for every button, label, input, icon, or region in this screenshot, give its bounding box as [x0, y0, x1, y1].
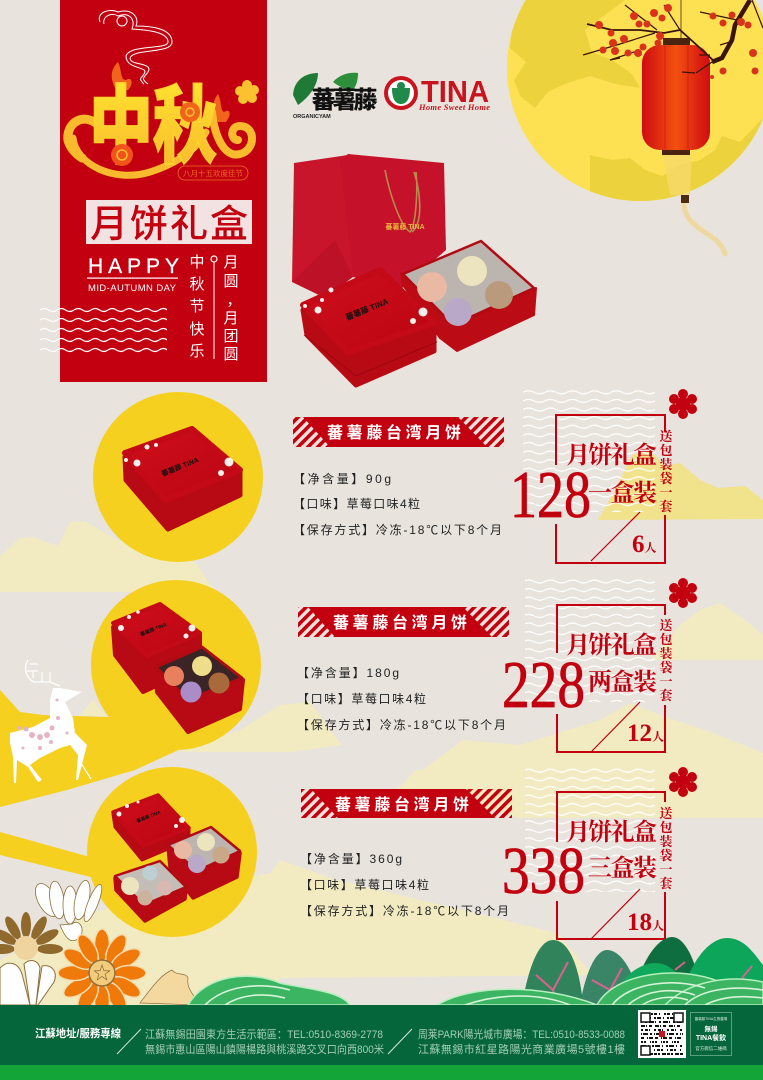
- price card 2: 12人: [627, 720, 664, 747]
- qr code: [638, 1010, 686, 1058]
- subtitle 月饼礼盒: 月饼礼盒: [90, 204, 248, 246]
- price card 2: [502, 578, 673, 752]
- ribbon 1: [293, 417, 504, 447]
- details 2: 【保存方式】冷冻-18℃以下8个月: [297, 717, 506, 732]
- orange daisy: ★: [94, 964, 110, 983]
- vertical greeting: 中秋节快乐: [189, 254, 205, 360]
- closed box: [303, 270, 437, 385]
- qr label: 蕃薯藤TINA生態農場: [695, 1016, 728, 1021]
- address block 2: [418, 1027, 625, 1056]
- price card 1: 月饼礼盒: [566, 442, 657, 469]
- happy text: [87, 255, 179, 294]
- details 3: 【口味】草莓口味4粒: [300, 877, 429, 892]
- slashes: [117, 1029, 412, 1054]
- striped hills: [188, 973, 763, 1005]
- white fan flower: [0, 961, 55, 1005]
- product row 1: [93, 388, 697, 563]
- tina logo: TINA: [421, 74, 489, 109]
- brand logos: [293, 73, 490, 120]
- price card 3: [502, 768, 673, 939]
- circle photo 3: 蕃薯藤 TINA: [135, 808, 162, 825]
- circle photo 1: [93, 392, 263, 562]
- orange daisy: [58, 929, 146, 1017]
- organicyam logo: 蕃薯藤: [312, 87, 377, 114]
- details 3: 【保存方式】冷冻-18℃以下8个月: [300, 903, 509, 918]
- price card 2: 月饼礼盒: [566, 632, 657, 659]
- price card 3: 月饼礼盒: [566, 819, 657, 846]
- curl ornaments: [111, 102, 200, 166]
- garden flowers: [0, 879, 199, 1017]
- date pill: [178, 166, 248, 180]
- smoke swirl: [99, 10, 172, 84]
- closed box: 蕃薯藤 TINA: [344, 296, 390, 322]
- title 中秋: 中秋: [89, 58, 217, 181]
- details 1: 【口味】草莓口味4粒: [293, 496, 420, 511]
- address block 1: [145, 1027, 384, 1056]
- price card 1: 128: [510, 458, 591, 532]
- circle photo 3: [87, 767, 257, 937]
- vertical couplet: 月圆，月团圆: [223, 254, 242, 363]
- address block 1: 江蘇無錫田園東方生活示範區：TEL:0510-8369-2778: [145, 1027, 383, 1041]
- qr label: TINA餐飲: [696, 1033, 726, 1042]
- organicyam logo: ORGANICYAM: [293, 114, 331, 120]
- open box: [401, 241, 536, 351]
- gift bag: 蕃薯藤 TINA: [385, 222, 425, 231]
- tan leaf: [140, 970, 199, 1005]
- ribbon 2: 蕃薯藤台湾月饼: [333, 613, 467, 632]
- product row 3: [87, 767, 697, 939]
- ribbon 1: 蕃薯藤台湾月饼: [327, 423, 461, 442]
- green hills: [188, 937, 763, 1005]
- price card 1: 送包装袋一套: [659, 429, 673, 514]
- details 2: [297, 665, 506, 732]
- moon: [507, 0, 763, 210]
- brown daisy: [0, 912, 63, 960]
- circle photo 1: 蕃薯藤 TINA: [160, 455, 200, 478]
- swash: [68, 112, 252, 175]
- qr label: 官方微信二維碼: [695, 1045, 727, 1052]
- flames: [112, 62, 230, 122]
- price card 3: 18人: [627, 909, 664, 936]
- price card 1: [510, 388, 673, 563]
- hills and yellow bands: [0, 450, 763, 1005]
- tina logo: [384, 74, 490, 112]
- details 1: 【保存方式】冷冻-18℃以下8个月: [293, 522, 502, 537]
- flower 2: [669, 578, 697, 608]
- vertical divider: [211, 256, 217, 359]
- price card 1: 一盒装: [588, 480, 657, 507]
- footer heading: 江蘇地址/服務專線: [35, 1026, 121, 1040]
- details 2: 【口味】草莓口味4粒: [297, 691, 426, 706]
- qr label: 無錫: [704, 1024, 718, 1033]
- organicyam logo: [293, 73, 377, 120]
- qr label: [690, 1012, 732, 1056]
- panel waves: [40, 305, 167, 355]
- gift bag: [292, 154, 446, 298]
- red title panel: [60, 0, 267, 382]
- flower ornament: [235, 80, 259, 104]
- circle photo 2: [91, 580, 261, 750]
- ribbon 3: 蕃薯藤台湾月饼: [335, 795, 469, 814]
- price card 3: 送包装袋一套: [659, 806, 673, 891]
- magnolia: [31, 879, 105, 941]
- deer: [10, 660, 91, 783]
- happy text: MID-AUTUMN DAY: [88, 283, 177, 294]
- details 3: 【净含量】360g: [300, 851, 402, 866]
- details 1: 【净含量】90g: [293, 471, 391, 486]
- circle photo 2: 蕃薯藤 TINA: [139, 621, 168, 638]
- price card 2: 228: [502, 648, 585, 722]
- footer: [0, 1005, 763, 1080]
- details 1: [293, 471, 502, 537]
- details 3: [300, 851, 509, 918]
- lantern and plum branch: [583, 0, 763, 254]
- address block 2: 江蘇無錫市紅星路陽光商業廣場5號樓1樓: [418, 1042, 625, 1056]
- address block 2: 周莱PARK陽光城市廣場：TEL:0510-8533-0088: [418, 1027, 625, 1041]
- product row 2: [91, 578, 697, 752]
- address block 1: 無錫市惠山區陽山鎮陽楊路與桃溪路交叉口向西800米: [145, 1042, 384, 1056]
- price card 2: 两盒装: [588, 669, 657, 696]
- details 2: 【净含量】180g: [297, 665, 399, 680]
- tall mounds: [522, 937, 763, 1005]
- ribbon 2: [298, 607, 509, 637]
- flower 3: [669, 767, 697, 797]
- price card 2: 送包装袋一套: [659, 618, 673, 703]
- ribbon 3: [301, 789, 512, 818]
- happy text: HAPPY: [88, 255, 179, 278]
- date pill: 八月十五欢度佳节: [183, 168, 243, 178]
- tina logo: Home Sweet Home: [418, 102, 490, 112]
- price card 3: 338: [502, 834, 585, 908]
- flower 1: [669, 389, 697, 419]
- price card 3: 三盒装: [588, 855, 657, 882]
- price card 1: 6人: [632, 531, 657, 558]
